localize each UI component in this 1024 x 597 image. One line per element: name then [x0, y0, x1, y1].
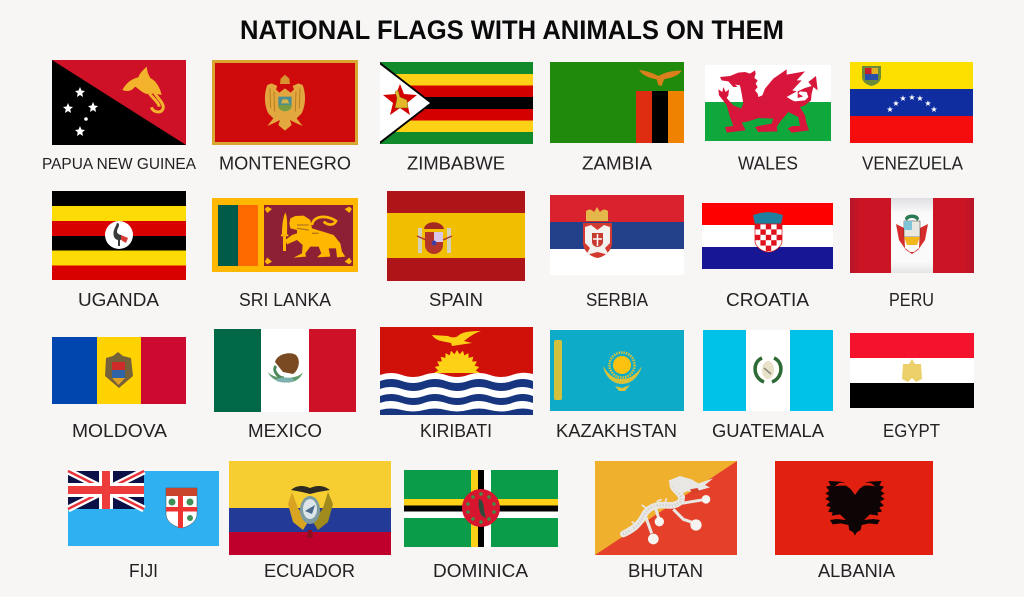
- flag: Moldova: [52, 337, 186, 404]
- flag: Kazakhstan: [550, 330, 684, 411]
- flag: Albania: [775, 461, 933, 555]
- label: Kazakhstan: KAZAKHSTAN: [556, 420, 677, 441]
- flag: Ecuador: [229, 461, 391, 555]
- label: Wales: WALES: [738, 152, 798, 174]
- flag: Venezuela: ★: [924, 99, 932, 108]
- flag: Venezuela: ★: [886, 105, 894, 114]
- label: Mexico: MEXICO: [248, 420, 322, 441]
- flag: Venezuela: [850, 62, 973, 143]
- label: Fiji: FIJI: [129, 560, 158, 581]
- flag: Serbia: [550, 195, 684, 275]
- label: Montenegro: MONTENEGRO: [219, 152, 351, 174]
- flag: Dominica: [404, 470, 558, 547]
- label: Venezuela: VENEZUELA: [862, 152, 964, 174]
- flag: Guatemala: [703, 330, 833, 411]
- label: Papua New Guinea: PAPUA NEW GUINEA: [42, 156, 197, 173]
- flag: Peru: [850, 198, 974, 273]
- flag: Venezuela: ★: [916, 94, 924, 103]
- label: Guatemala: GUATEMALA: [712, 420, 825, 441]
- flag: Uganda: [52, 191, 186, 280]
- flag: Venezuela: ★: [899, 94, 907, 103]
- label: Zimbabwe: ZIMBABWE: [407, 152, 505, 174]
- label: Ecuador: ECUADOR: [264, 560, 355, 581]
- label: Peru: PERU: [889, 289, 934, 310]
- label: Bhutan: BHUTAN: [628, 560, 703, 581]
- title: NATIONAL FLAGS WITH ANIMALS ON THEM: [240, 15, 784, 45]
- flag: Kiribati: [380, 327, 533, 415]
- flag: Bhutan: [595, 461, 737, 555]
- flag: Venezuela: ★: [930, 105, 938, 114]
- flag: Spain: [387, 191, 525, 281]
- flag: Egypt: [850, 333, 974, 408]
- label: Zambia: ZAMBIA: [582, 152, 653, 174]
- label: Kiribati: KIRIBATI: [420, 420, 492, 441]
- flag: Venezuela: ★: [908, 93, 916, 102]
- flag: Sri Lanka: [212, 198, 358, 272]
- flag: Montenegro: [212, 60, 358, 145]
- label: Moldova: MOLDOVA: [72, 420, 168, 441]
- label: Spain: SPAIN: [429, 289, 483, 310]
- flag: Fiji: [68, 471, 219, 546]
- flag: Papua New Guinea: [52, 60, 186, 145]
- flag: Venezuela: ★: [892, 99, 900, 108]
- flag: Zimbabwe: [380, 62, 533, 144]
- flag: Wales: [705, 65, 831, 141]
- label: Croatia: CROATIA: [726, 289, 810, 310]
- label: Egypt: EGYPT: [883, 420, 940, 441]
- label: Dominica: DOMINICA: [433, 560, 529, 581]
- flag: Zambia: [550, 62, 684, 143]
- label: Uganda: UGANDA: [78, 289, 160, 310]
- flag: Mexico: [214, 329, 356, 412]
- label: Serbia: SERBIA: [586, 289, 649, 310]
- flag: Croatia: [702, 203, 833, 269]
- label: Albania: ALBANIA: [818, 560, 896, 581]
- label: Sri Lanka: SRI LANKA: [239, 289, 332, 310]
